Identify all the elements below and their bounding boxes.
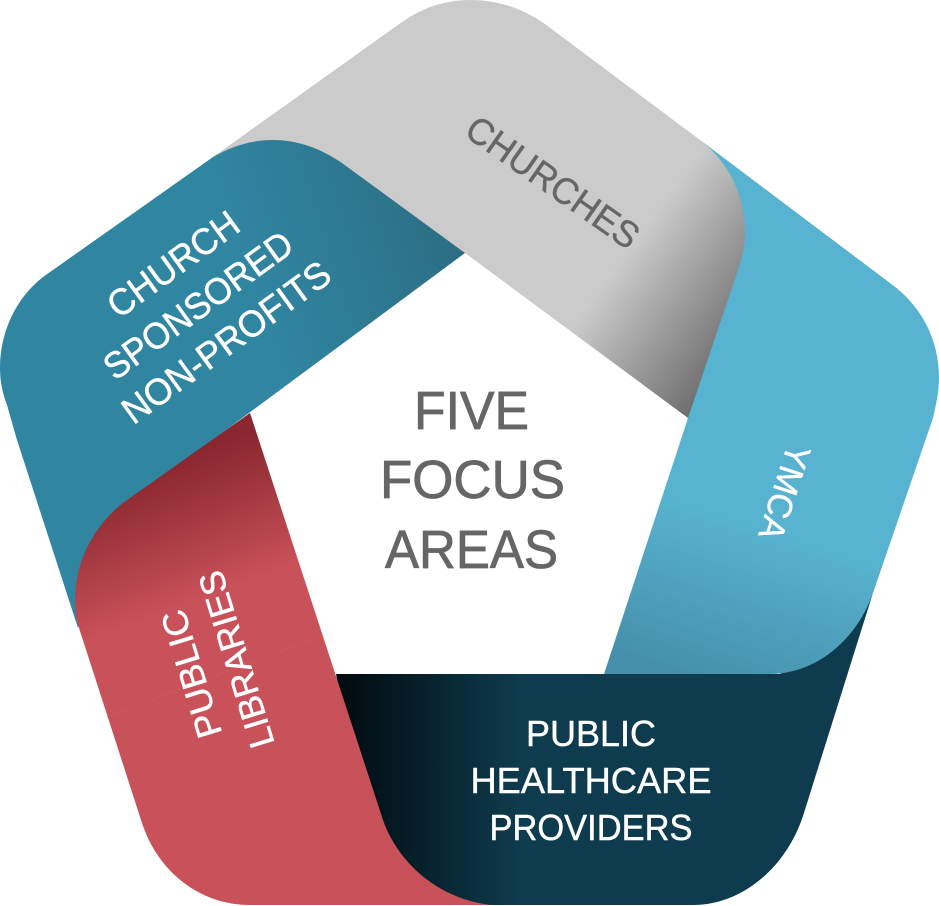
label: church sponsored non-profits: SPONSORED — [96, 223, 301, 388]
center title: five focus areas: AREAS — [385, 520, 558, 580]
label: public healthcare providers: PUBLIC — [526, 713, 656, 754]
panel: church sponsored non-profits — [0, 140, 465, 628]
label: churches: CHURCHES — [458, 108, 647, 257]
label: public libraries: LIBRARIES — [192, 566, 282, 752]
label: public healthcare providers — [470, 713, 712, 848]
center title: five focus areas: FOCUS — [380, 450, 565, 510]
label: church sponsored non-profits: CHURCH — [99, 203, 247, 326]
label: public libraries: PUBLIC — [154, 605, 230, 743]
panel: public healthcare providers — [336, 596, 872, 905]
label: church sponsored non-profits: NON-PROFITS — [114, 253, 339, 432]
center title: five focus areas — [380, 381, 565, 580]
label: YMCA: YMCA — [750, 440, 818, 545]
panel: public libraries — [75, 413, 490, 905]
label: public healthcare providers: HEALTHCARE — [470, 760, 712, 801]
panel: churches — [213, 0, 745, 418]
label: public healthcare providers: PROVIDERS — [490, 807, 692, 848]
center title: five focus areas: FIVE — [414, 381, 529, 441]
panel: YMCA — [604, 140, 939, 674]
